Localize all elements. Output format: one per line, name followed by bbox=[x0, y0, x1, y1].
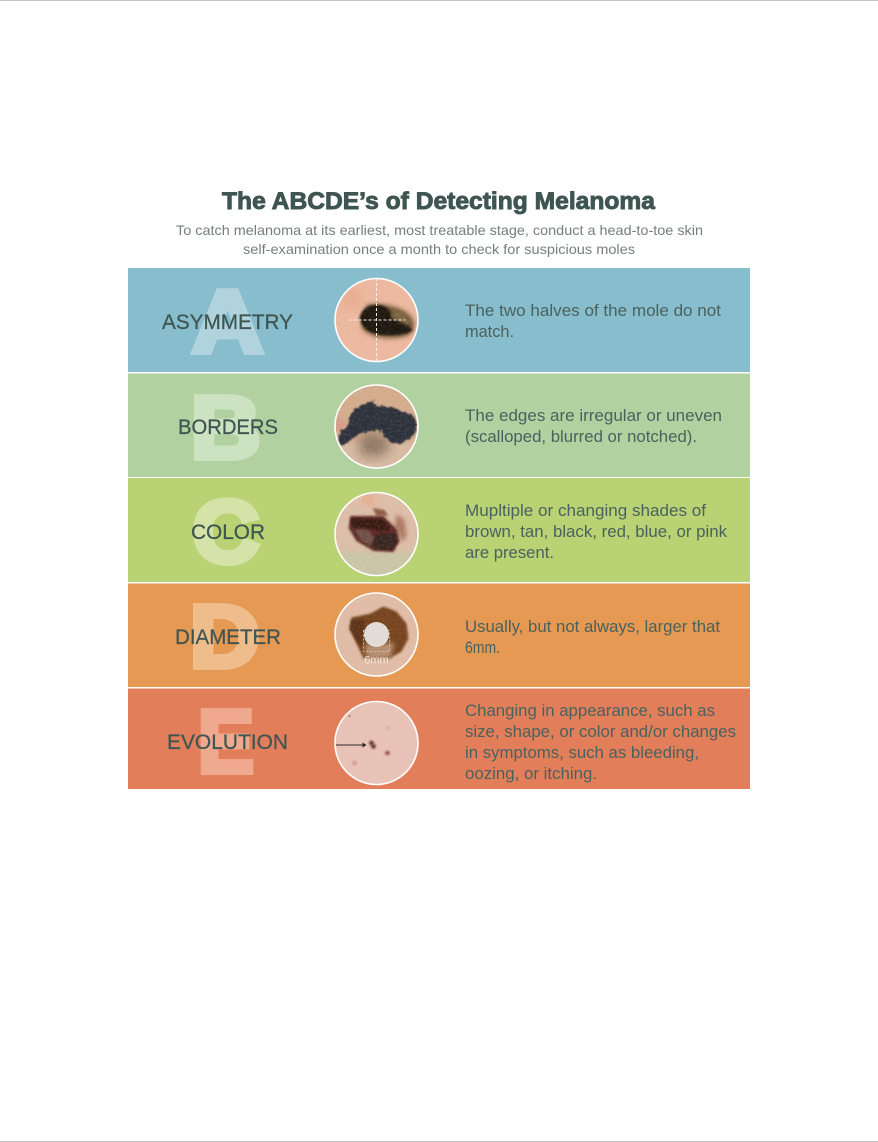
big letter B: B bbox=[191, 378, 261, 477]
description bbox=[465, 302, 721, 341]
subtitle text: self-examination once a month to check for suspicious moles bbox=[243, 241, 635, 257]
label: borders: BORDERS bbox=[178, 416, 278, 439]
subtitle text: To catch melanoma at its earliest, most treatable stage, conduct a head-to-toe skin bbox=[176, 222, 703, 238]
photo: mole with 6mm marker bbox=[334, 592, 418, 676]
panel: borders bbox=[128, 374, 750, 477]
description bbox=[465, 618, 720, 657]
big letter D: D bbox=[190, 587, 260, 686]
description: in symptoms, such as bleeding, bbox=[465, 744, 699, 762]
6mm label: 6mm bbox=[364, 654, 389, 666]
panel: color bbox=[128, 478, 750, 582]
title: The ABCDE’s of Detecting Melanoma bbox=[222, 188, 656, 215]
description: 6mm. bbox=[465, 639, 500, 657]
photo: skin with spots and arrow bbox=[334, 701, 418, 785]
panel: asymmetry bbox=[128, 268, 750, 372]
description: The two halves of the mole do not bbox=[465, 302, 721, 320]
arrow bbox=[336, 742, 366, 748]
label: evolution: EVOLUTION bbox=[167, 731, 288, 754]
subtitle text bbox=[176, 222, 703, 257]
description: Changing in appearance, such as bbox=[465, 702, 715, 720]
description: brown, tan, black, red, blue, or pink bbox=[465, 523, 728, 541]
description: oozing, or itching. bbox=[465, 765, 597, 783]
panel: evolution bbox=[128, 688, 750, 791]
description bbox=[465, 407, 722, 446]
photo: multi-colored mole bbox=[334, 492, 418, 580]
panel: diameter bbox=[128, 584, 750, 687]
description: size, shape, or color and/or changes bbox=[465, 723, 736, 741]
big letter A: A bbox=[192, 272, 263, 371]
description: The edges are irregular or uneven bbox=[465, 407, 722, 425]
description: Mupltiple or changing shades of bbox=[465, 502, 706, 520]
label: asymmetry: ASYMMETRY bbox=[162, 311, 293, 334]
big letter C: C bbox=[192, 483, 259, 582]
description: Usually, but not always, larger that bbox=[465, 618, 720, 636]
photo: asymmetric mole bbox=[334, 278, 418, 362]
description bbox=[465, 702, 736, 783]
description: (scalloped, blurred or notched). bbox=[465, 428, 697, 446]
description bbox=[465, 502, 728, 562]
description: match. bbox=[465, 323, 514, 341]
label: diameter: DIAMETER bbox=[175, 626, 281, 649]
big letter E: E bbox=[198, 693, 254, 791]
description: are present. bbox=[465, 544, 554, 562]
label: color: COLOR bbox=[191, 521, 265, 544]
photo: irregular border mole bbox=[332, 384, 418, 472]
